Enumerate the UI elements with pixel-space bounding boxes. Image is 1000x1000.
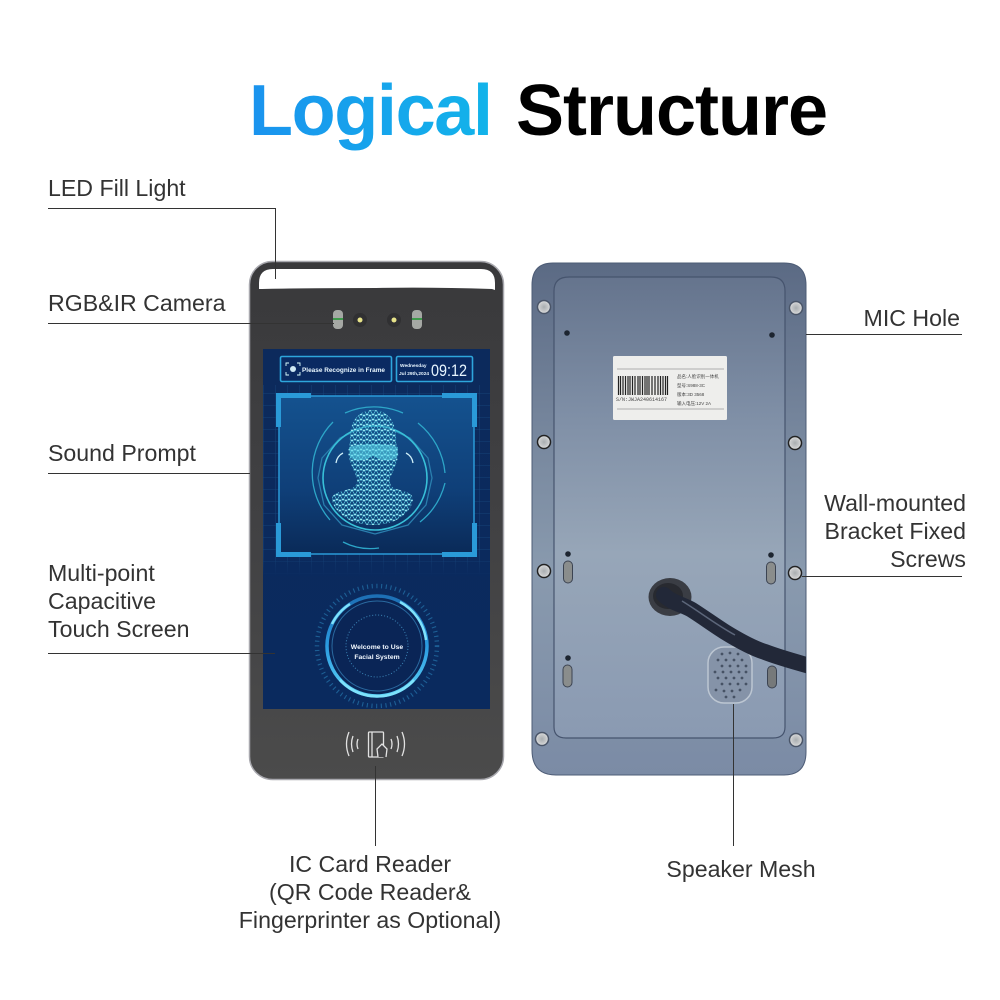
date and time banner: 09:12 [431,361,467,380]
label: LED Fill Light: LED Fill Light [48,175,186,201]
rear inner plate [554,277,785,738]
label: Wall-mounted Bracket Fixed Screws: Bracket Fixed [825,518,966,544]
label: Multi-point Capacitive Touch Screen: Multi-point [48,560,155,586]
prompt banner [280,356,392,382]
label: Multi-point Capacitive Touch Screen: Touch Screen [48,616,190,642]
label: RGB&IR Camera: RGB&IR Camera [48,290,226,316]
panel: rear device [532,263,810,775]
welcome circle [317,586,437,706]
label: MIC Hole: MIC Hole [864,305,960,331]
product label: 输入电压:12V 2A [677,400,711,407]
scan rings [312,407,445,549]
LED fill light bar [259,269,495,290]
label: IC Card Reader: (QR Code Reader& [269,879,472,905]
label: IC Card Reader [239,766,501,933]
label: Sound Prompt: Sound Prompt [48,440,196,466]
product label: 型号:S988-3C [677,382,706,389]
holes and mounting slots [563,330,776,688]
date and time banner: Wednesday [400,363,427,369]
icon: card reader [346,732,404,757]
panel: front device [250,262,504,780]
label: Multi-point Capacitive Touch Screen: Capacitive [48,588,156,614]
speaker mesh [708,647,752,703]
date and time banner: Jul 29th,2024 [399,371,430,376]
background grid [263,385,490,576]
label: Wall-mounted Bracket Fixed Screws: Screws [890,546,966,572]
label: IC Card Reader: IC Card Reader [289,851,451,877]
welcome circle: Facial System [354,654,400,661]
label: LED Fill Light [48,175,276,279]
camera module [333,310,422,329]
cable and grommet [648,578,810,666]
product label: S/N:JWJA240614167 [616,397,667,403]
welcome circle: Welcome to Use [351,644,403,651]
title: Logical [249,71,493,151]
date and time banner [396,356,472,382]
label: Multi-point Capacitive Touch Screen [48,560,275,654]
device body [250,262,504,780]
product label: 版本:3D 3568 [677,391,705,398]
label: Speaker Mesh: Speaker Mesh [666,856,816,882]
face mesh bust [332,410,413,525]
label: Wall-mounted Bracket Fixed Screws: Wall-mounted [824,490,966,516]
label: Wall-mounted Bracket Fixed Screws [802,490,966,576]
screws [536,300,802,746]
label: IC Card Reader: Fingerprinter as Optional) [239,907,501,933]
rear shell [532,263,806,775]
product label: 品名:人脸识别一体机 [677,373,719,380]
face frame [278,396,474,554]
glasses highlight [349,444,398,460]
title: Structure [516,71,828,151]
prompt banner: Please Recognize in Frame [302,367,385,374]
touch screen [263,349,490,709]
product label [613,356,727,420]
